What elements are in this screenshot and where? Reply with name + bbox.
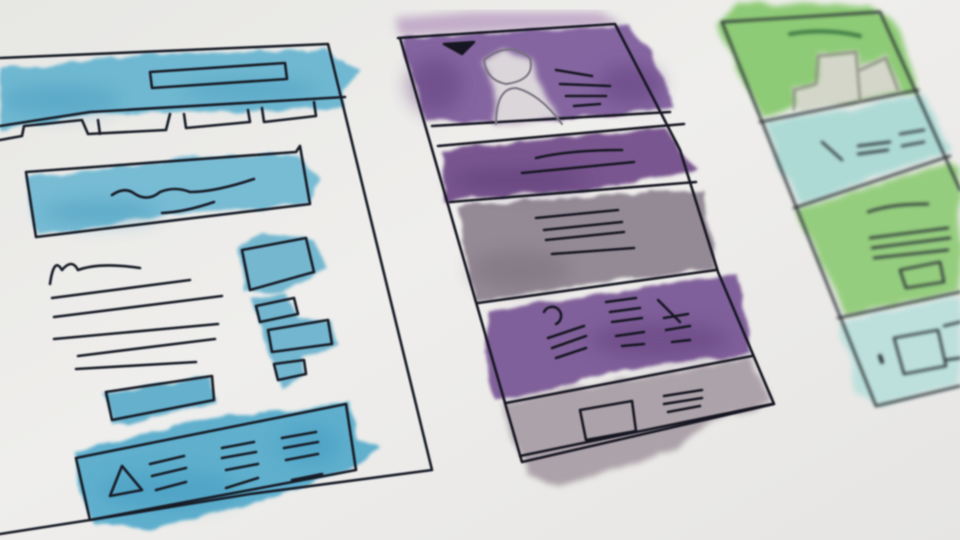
header wash xyxy=(0,50,362,132)
ink xyxy=(722,12,960,406)
pigment mottling xyxy=(407,57,730,358)
bottom teal wash xyxy=(840,296,960,406)
band 4 wash xyxy=(484,274,752,402)
skyline sketch xyxy=(790,50,900,112)
footer wash xyxy=(500,358,772,484)
wireframe ink outlines xyxy=(0,44,432,534)
footer wash xyxy=(76,402,380,528)
sketch figure (unpainted) xyxy=(480,46,560,126)
ink xyxy=(398,24,774,462)
top edge wash xyxy=(395,12,625,36)
band 3 wash xyxy=(458,190,716,302)
panel: middle purple wireframe xyxy=(395,12,774,484)
panel: right green wireframe xyxy=(716,2,960,406)
panel: left blue wireframe xyxy=(0,44,432,534)
sidebar block wash xyxy=(238,234,328,292)
teal band wash xyxy=(766,92,950,205)
pigment mottling xyxy=(0,80,340,508)
hero wash xyxy=(402,26,675,124)
hero wash xyxy=(24,154,322,236)
band 2 wash xyxy=(440,128,698,200)
small block washes xyxy=(250,292,338,390)
top green wash xyxy=(716,2,918,118)
button wash xyxy=(104,376,214,424)
green band wash xyxy=(796,162,960,316)
